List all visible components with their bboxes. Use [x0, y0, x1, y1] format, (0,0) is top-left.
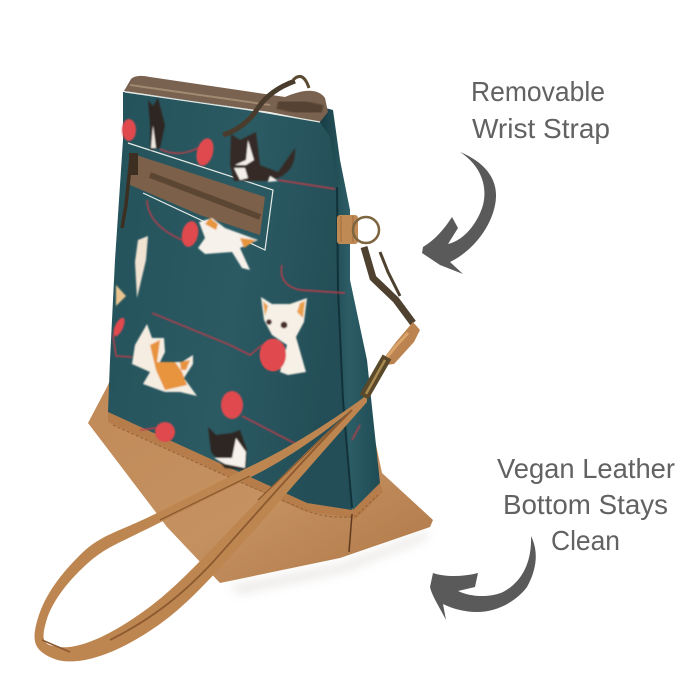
annotation: leather bottom heading: Clean	[551, 525, 620, 556]
strap loop tab	[337, 215, 379, 244]
bag: side panel	[318, 106, 380, 510]
print: yarn balls and lines	[111, 119, 360, 444]
annotation: wrist strap heading: Wrist Strap	[472, 113, 610, 144]
arrow: to leather bottom	[430, 536, 536, 620]
annotation: leather bottom heading: Vegan Leather	[497, 453, 675, 484]
annotation: wrist strap heading	[471, 76, 610, 144]
front pocket zipper	[122, 143, 273, 250]
seam shadow	[337, 187, 352, 508]
black cat centre	[230, 132, 295, 181]
black cat bottom	[208, 427, 247, 470]
arrow: to wrist strap	[422, 152, 496, 274]
metal clasp	[364, 247, 413, 323]
print: cats and dogs	[116, 98, 307, 470]
bag: leather bottom	[88, 380, 433, 583]
corgi	[132, 324, 197, 396]
bag illustration	[88, 76, 433, 583]
wrist strap	[35, 322, 420, 661]
strap streaks	[42, 410, 352, 652]
strap tab and ferrule	[378, 322, 420, 366]
zipper pull	[223, 76, 309, 135]
white kitten	[261, 297, 307, 375]
black cat top	[148, 98, 165, 150]
pocket dog	[198, 218, 258, 270]
bag: teal front panel	[108, 92, 352, 510]
annotation: leather bottom heading: Bottom Stays	[503, 489, 668, 520]
side cat	[135, 236, 148, 298]
ground shadow	[228, 530, 430, 594]
annotation: leather bottom heading	[497, 453, 675, 556]
top zipper	[124, 76, 328, 122]
annotation: wrist strap heading: Removable	[471, 76, 605, 107]
